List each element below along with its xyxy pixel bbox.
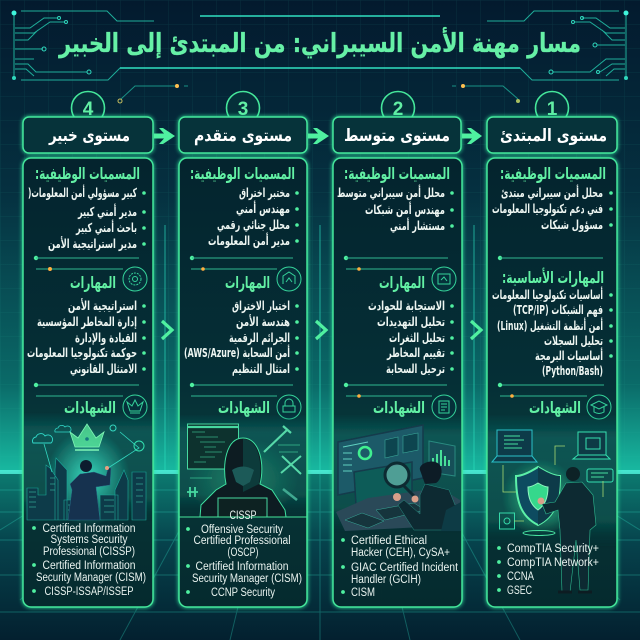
list: certifications: Security Manager (CISM) xyxy=(36,572,146,584)
list: certifications: Certified Information xyxy=(196,561,288,573)
list: certifications xyxy=(341,535,459,599)
list: skills: حوكمة تكنولوجيا المعلومات xyxy=(27,345,137,360)
list: skills: تحليل السجلات xyxy=(544,333,603,348)
divider xyxy=(34,256,139,396)
list: certifications: Certified Information xyxy=(42,560,136,572)
heading: certificates: الشهادات xyxy=(218,398,270,417)
icon: lock laptop xyxy=(277,395,301,419)
heading: certificates: الشهادات xyxy=(529,398,581,417)
chevron xyxy=(316,321,326,339)
illustration: expert with crown over city xyxy=(24,412,152,526)
list: skills: ترحيل السحابة xyxy=(386,361,445,376)
list: skills xyxy=(27,298,146,376)
level 2 number badge xyxy=(382,92,414,124)
central gutter lines xyxy=(165,225,474,470)
list: skills: أساسيات البرمجة xyxy=(535,347,603,363)
list: skills: اختبار الاختراق xyxy=(232,298,290,313)
list: job titles xyxy=(28,184,146,251)
list: skills: القيادة والإدارة xyxy=(75,330,137,345)
list: job titles: مدير أمن المعلومات xyxy=(208,232,290,248)
heading: skills: المهارات xyxy=(225,273,270,292)
list: skills: هندسة الأمن xyxy=(236,314,290,329)
list: certifications: Certified Information xyxy=(42,523,136,535)
list: certifications: CCNP Security xyxy=(211,587,275,599)
list: certifications: Systems Security xyxy=(50,534,128,546)
list: certifications: Professional (CISSP) xyxy=(43,546,135,558)
list: skills xyxy=(492,286,613,378)
heading: job titles: المسميات الوظيفية: xyxy=(190,164,295,183)
list: certifications: Certified Professional xyxy=(194,535,290,547)
arrow: level 1 to 2 xyxy=(462,128,482,144)
list: skills: فهم الشبكات (TCP/IP) xyxy=(513,302,603,317)
level 1 number badge: 1 xyxy=(547,99,558,120)
heading: skills: المهارات xyxy=(70,273,116,292)
list: job titles: مستشار أمني xyxy=(390,217,445,233)
list: skills: تحليل الثغرات xyxy=(389,330,445,345)
list: certifications: Security Manager (CISM) xyxy=(192,573,302,585)
arrow: level 3 to 4 xyxy=(154,128,175,144)
level 4 number badge xyxy=(72,92,104,124)
header: level 2 xyxy=(333,117,461,153)
list: job titles: مسؤول شبكات xyxy=(541,217,603,232)
list: certifications: Hacker (CEH), CySA+ xyxy=(351,547,450,559)
list: skills: تقييم المخاطر xyxy=(386,345,445,360)
heading: job titles: المسميات الوظيفية: xyxy=(344,164,450,183)
list: skills: (Python/Bash) xyxy=(542,363,603,378)
list: job titles: باحث أمني كبير xyxy=(75,219,137,235)
heading: job titles: المسميات الوظيفية: xyxy=(35,164,140,183)
list: job titles: كبير مسؤولي أمن المعلومات( xyxy=(28,184,137,200)
level 4 number badge: 4 xyxy=(83,99,94,120)
list: job titles: مختبر اختراق xyxy=(239,185,290,200)
icon: analysis xyxy=(432,267,456,291)
icon: crown xyxy=(123,395,147,419)
divider xyxy=(190,256,293,396)
list: job titles: محلل أمن سيبراني متوسط xyxy=(337,184,445,200)
list: certifications: CompTIA Network+ xyxy=(507,557,599,569)
list: job titles xyxy=(337,184,454,233)
list: skills: الاستجابة للحوادث xyxy=(368,298,445,313)
icon: brain gear xyxy=(123,267,147,291)
panel: beginner xyxy=(487,158,617,607)
list: skills: امتثال التنظيم xyxy=(232,361,290,376)
list: certifications: GSEC xyxy=(507,585,532,597)
level 3 number badge xyxy=(226,92,260,124)
heading: certificates: الشهادات xyxy=(64,398,116,417)
list: skills: استراتيجية الأمن xyxy=(68,298,137,313)
icon: graduation cap xyxy=(587,395,611,419)
list: certifications: CISM xyxy=(351,587,375,599)
list: job titles: مهندس أمن شبكات xyxy=(365,201,445,217)
header: level 3: مستوى متقدم xyxy=(194,126,292,146)
list: skills: تحليل التهديدات xyxy=(377,314,445,329)
list: job titles: محلل جنائي رقمي xyxy=(217,217,290,232)
panel: intermediate xyxy=(333,158,462,607)
list: certifications: Offensive Security xyxy=(201,524,283,536)
illustration: analyst with magnifying glass xyxy=(334,414,461,534)
list: certifications: CISSP xyxy=(230,510,257,522)
panel: advanced xyxy=(179,158,307,607)
icon: document pen xyxy=(432,395,456,419)
list: skills xyxy=(368,298,454,376)
list: certifications: CISSP-ISSAP/ISSEP xyxy=(44,586,134,598)
list: certifications xyxy=(497,543,599,597)
list: certifications: GIAC Certified Incident xyxy=(351,562,459,574)
divider xyxy=(498,256,604,398)
level 3 number badge: 3 xyxy=(238,99,248,120)
list: job titles: مهندس أمني xyxy=(236,200,290,216)
list: job titles: مدير أمني كبير xyxy=(77,203,137,219)
list: certifications: Handler (GCIH) xyxy=(351,574,421,586)
header: level 1 xyxy=(487,117,617,153)
heading: skills: المهارات xyxy=(379,273,425,292)
list: certifications xyxy=(32,523,146,598)
illustration: shield and specialist xyxy=(488,414,616,592)
list: certifications: (OSCP) xyxy=(228,547,259,559)
panel: expert xyxy=(23,158,153,607)
header: level 4: مستوى خبير xyxy=(48,126,130,146)
list: certifications: Certified Ethical xyxy=(351,535,427,547)
decorative callout traces xyxy=(118,84,520,103)
list: skills: أمن السحابة (AWS/Azure) xyxy=(184,344,290,360)
divider xyxy=(344,256,448,398)
list: job titles: مدير استراتيجية الأمن xyxy=(48,236,137,251)
title frame circuitry xyxy=(12,10,628,80)
list: certifications: CCNA xyxy=(507,571,534,583)
level 2 number badge: 2 xyxy=(393,99,403,120)
list: job titles xyxy=(492,184,613,232)
list: skills: الجرائم الرقمية xyxy=(229,330,290,345)
header: level 1: مستوى المبتدئ xyxy=(500,126,607,146)
chevron xyxy=(471,321,481,339)
icon: hacker spider xyxy=(277,267,301,291)
header: level 2: مستوى متوسط xyxy=(344,126,450,146)
arrow: level 2 to 3 xyxy=(308,128,329,144)
list: certifications: CompTIA Security+ xyxy=(507,543,599,555)
list: skills xyxy=(184,298,299,376)
list: skills: الامتثال القانوني xyxy=(70,361,137,376)
level 1 number badge xyxy=(536,92,568,124)
heading: certificates: الشهادات xyxy=(373,398,425,417)
list: certifications xyxy=(186,510,302,599)
header: level 4 xyxy=(23,117,153,153)
chevron xyxy=(162,321,172,339)
list: skills: إدارة المخاطر المؤسسية xyxy=(37,314,137,329)
header: level 3 xyxy=(179,117,307,153)
list: job titles xyxy=(208,185,299,248)
illustration: hooded hacker xyxy=(179,414,307,522)
